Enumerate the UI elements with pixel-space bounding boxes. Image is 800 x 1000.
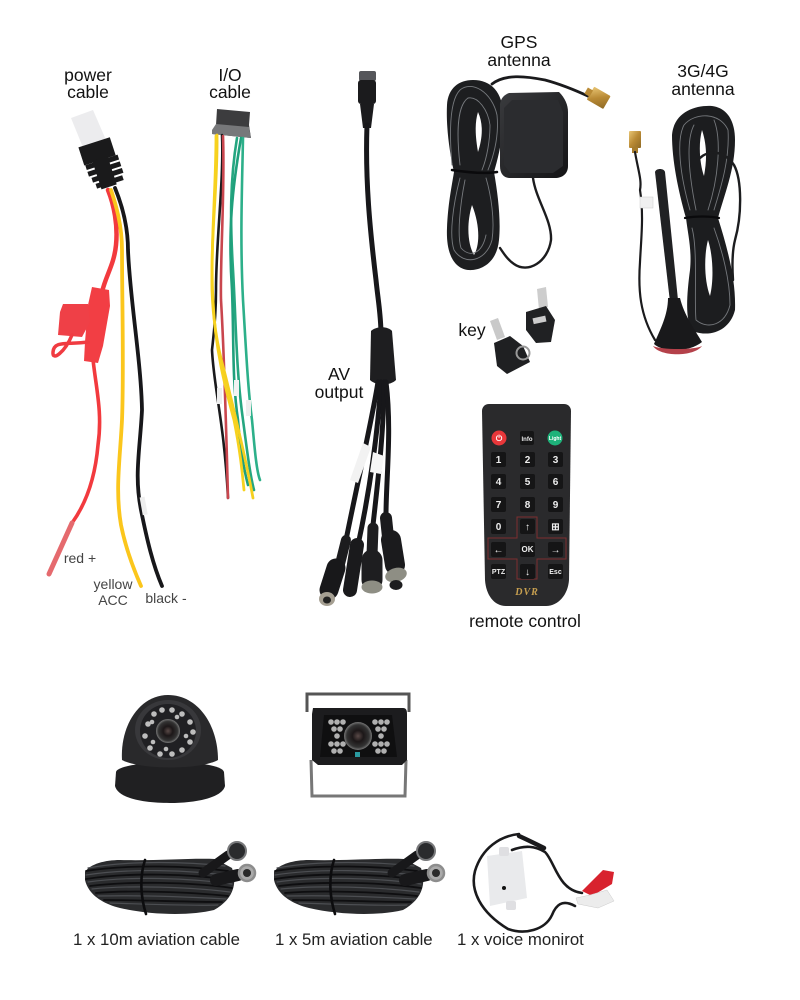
remote buttons: 2 <box>525 455 531 466</box>
ring <box>135 700 201 760</box>
black wire <box>115 188 162 586</box>
remote buttons: 1 <box>496 455 502 466</box>
aviation cable 5m <box>274 842 444 914</box>
yellow wire <box>111 190 141 586</box>
remote body <box>482 404 571 606</box>
white connector <box>71 110 106 150</box>
AV plugs <box>319 518 408 606</box>
AV output cable <box>319 71 408 606</box>
base <box>115 762 225 803</box>
heading: GPS antenna: GPS <box>501 32 537 52</box>
yellow wires <box>212 135 253 498</box>
heading: 3G/4G antenna: 3G/4G <box>677 61 729 81</box>
dome camera <box>115 695 225 803</box>
IR LEDs <box>142 707 196 757</box>
SMA connector <box>582 84 611 109</box>
white plug <box>576 890 614 908</box>
remote buttons: 8 <box>525 500 531 511</box>
body <box>312 708 407 765</box>
rear camera <box>307 694 409 796</box>
remote buttons: OK <box>522 545 534 554</box>
remote buttons: 3 <box>553 455 559 466</box>
remote buttons: Esc <box>549 569 562 576</box>
heading: I/O cable: I/O <box>218 65 242 85</box>
dome <box>122 695 218 768</box>
remote buttons <box>491 430 563 579</box>
connector block <box>212 109 251 138</box>
black wire loop <box>474 834 575 931</box>
remote buttons: 5 <box>525 477 531 488</box>
top connector <box>358 71 376 128</box>
label: key: key <box>458 320 486 340</box>
black strain relief <box>78 137 126 192</box>
antenna body <box>500 92 568 178</box>
heading: 3G/4G antenna: antenna <box>671 79 735 99</box>
label: yellow ACC: yellow <box>94 576 133 592</box>
red wires <box>221 136 228 498</box>
heading: power cable: power <box>64 65 112 85</box>
remote buttons: ⏻ <box>496 434 503 443</box>
antenna cable <box>635 152 655 340</box>
remote buttons: ↑ <box>525 522 530 533</box>
remote control <box>482 404 571 606</box>
green wires <box>231 138 254 490</box>
heading: GPS antenna: antenna <box>487 50 551 70</box>
cable coil <box>447 80 503 270</box>
remote buttons: ⊞ <box>551 522 560 533</box>
remote buttons: PTZ <box>492 569 506 576</box>
main cable <box>367 125 381 335</box>
antenna cable <box>492 77 590 97</box>
whip <box>655 169 678 302</box>
magnetic base <box>654 298 702 350</box>
red fuse holder <box>53 287 110 363</box>
caption: 10m cable: 1 x 10m aviation cable <box>73 930 240 949</box>
ferrite <box>370 327 396 384</box>
bracket <box>307 694 409 712</box>
IR LEDs <box>328 719 390 754</box>
key 2 <box>526 287 555 343</box>
cable coil <box>672 106 740 334</box>
DVR logo: DVR <box>514 587 539 598</box>
SMA connector <box>629 131 641 153</box>
wire labels: red + <box>64 550 96 566</box>
label: remote control: remote control <box>469 611 581 631</box>
d-pad outline <box>488 517 566 579</box>
caption: voice monitor: 1 x voice monirot <box>457 930 584 949</box>
remote buttons: ↓ <box>525 567 530 578</box>
remote buttons: → <box>550 545 560 556</box>
GPS antenna <box>447 77 611 270</box>
label: AV output: AV <box>328 364 350 384</box>
I/O cable <box>212 109 260 498</box>
power cable <box>49 110 162 586</box>
remote buttons: 6 <box>553 477 559 488</box>
black wire <box>212 135 228 498</box>
red wire <box>102 190 117 292</box>
split cables <box>346 382 378 540</box>
remote buttons: Light <box>549 436 561 442</box>
label: black -: black - <box>145 590 187 606</box>
remote buttons: 4 <box>496 477 502 488</box>
remote buttons: 7 <box>496 500 502 511</box>
label: yellow ACC: ACC <box>98 592 128 608</box>
aviation cable 10m <box>85 842 255 914</box>
module box <box>487 851 527 906</box>
remote buttons: ← <box>494 545 504 556</box>
heading: I/O cable: cable <box>209 82 251 102</box>
caption: 5m cable: 1 x 5m aviation cable <box>275 930 433 949</box>
label: AV output: output <box>315 382 363 402</box>
remote buttons: 0 <box>496 522 502 533</box>
voice monitor <box>474 834 614 931</box>
remote buttons: Info <box>522 437 533 443</box>
heading: power cable: cable <box>67 82 109 102</box>
key 1 <box>490 318 530 374</box>
keys <box>490 287 555 374</box>
remote buttons: 9 <box>553 500 559 511</box>
red plug <box>582 870 614 896</box>
3G/4G antenna <box>629 106 740 354</box>
